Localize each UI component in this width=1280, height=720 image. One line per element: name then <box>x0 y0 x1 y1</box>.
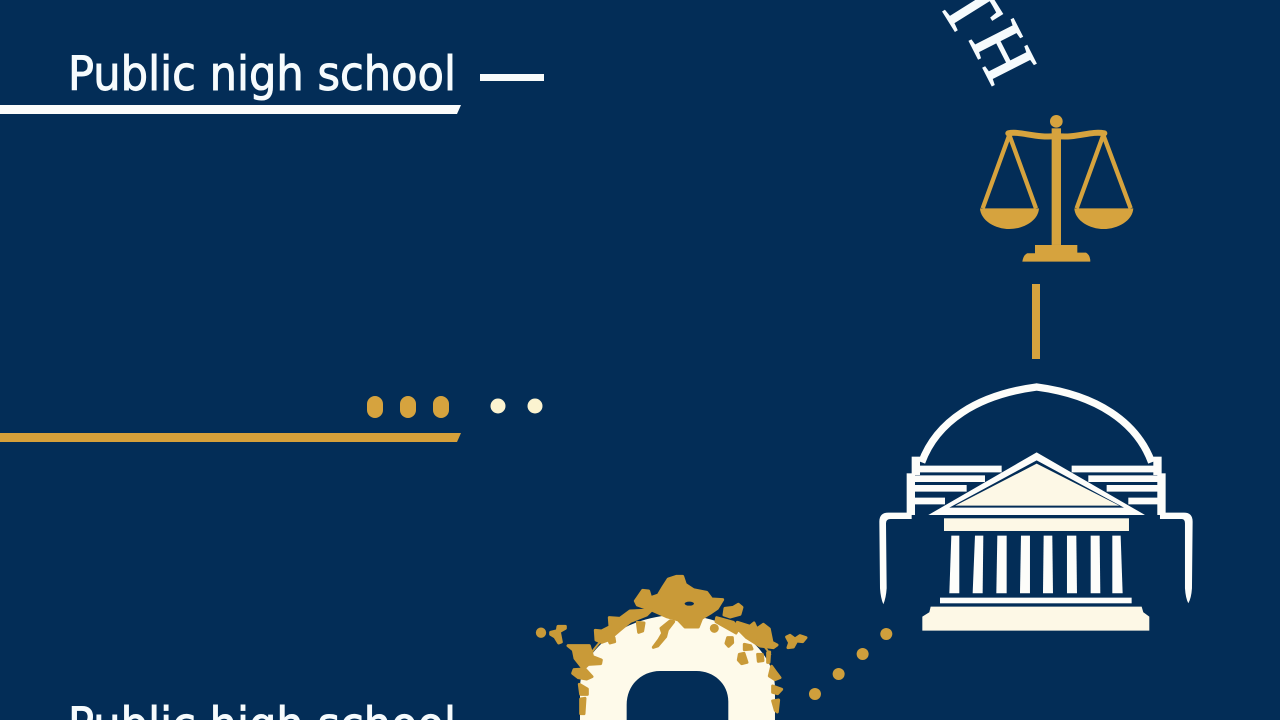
drum and wing outlines <box>879 457 1193 604</box>
dome <box>922 387 1152 462</box>
thin gold ring edge <box>590 617 771 655</box>
gold crown splatter <box>537 576 806 714</box>
emblem: cream arch with gold laurel <box>537 576 806 720</box>
gold connector line <box>1032 284 1040 359</box>
pediment <box>928 452 1145 515</box>
base steps <box>940 598 1132 603</box>
gold dotted trail <box>809 628 892 700</box>
curved serif title fragment: H <box>953 9 1052 95</box>
entablature <box>944 518 1129 531</box>
icon: domed government building <box>879 387 1193 631</box>
curved serif title fragment <box>923 0 1052 95</box>
white underline bar <box>0 105 461 114</box>
hole in splatter <box>685 602 694 606</box>
columns <box>949 536 1123 593</box>
white dash beside heading <box>480 74 544 81</box>
cream arch <box>580 615 775 720</box>
gold and cream dot row <box>367 396 542 418</box>
drum stripes <box>910 469 1163 501</box>
heading: public night school: Public nigh school <box>68 47 456 102</box>
icon: scales of justice <box>980 115 1133 262</box>
gold underline bar <box>0 433 461 442</box>
